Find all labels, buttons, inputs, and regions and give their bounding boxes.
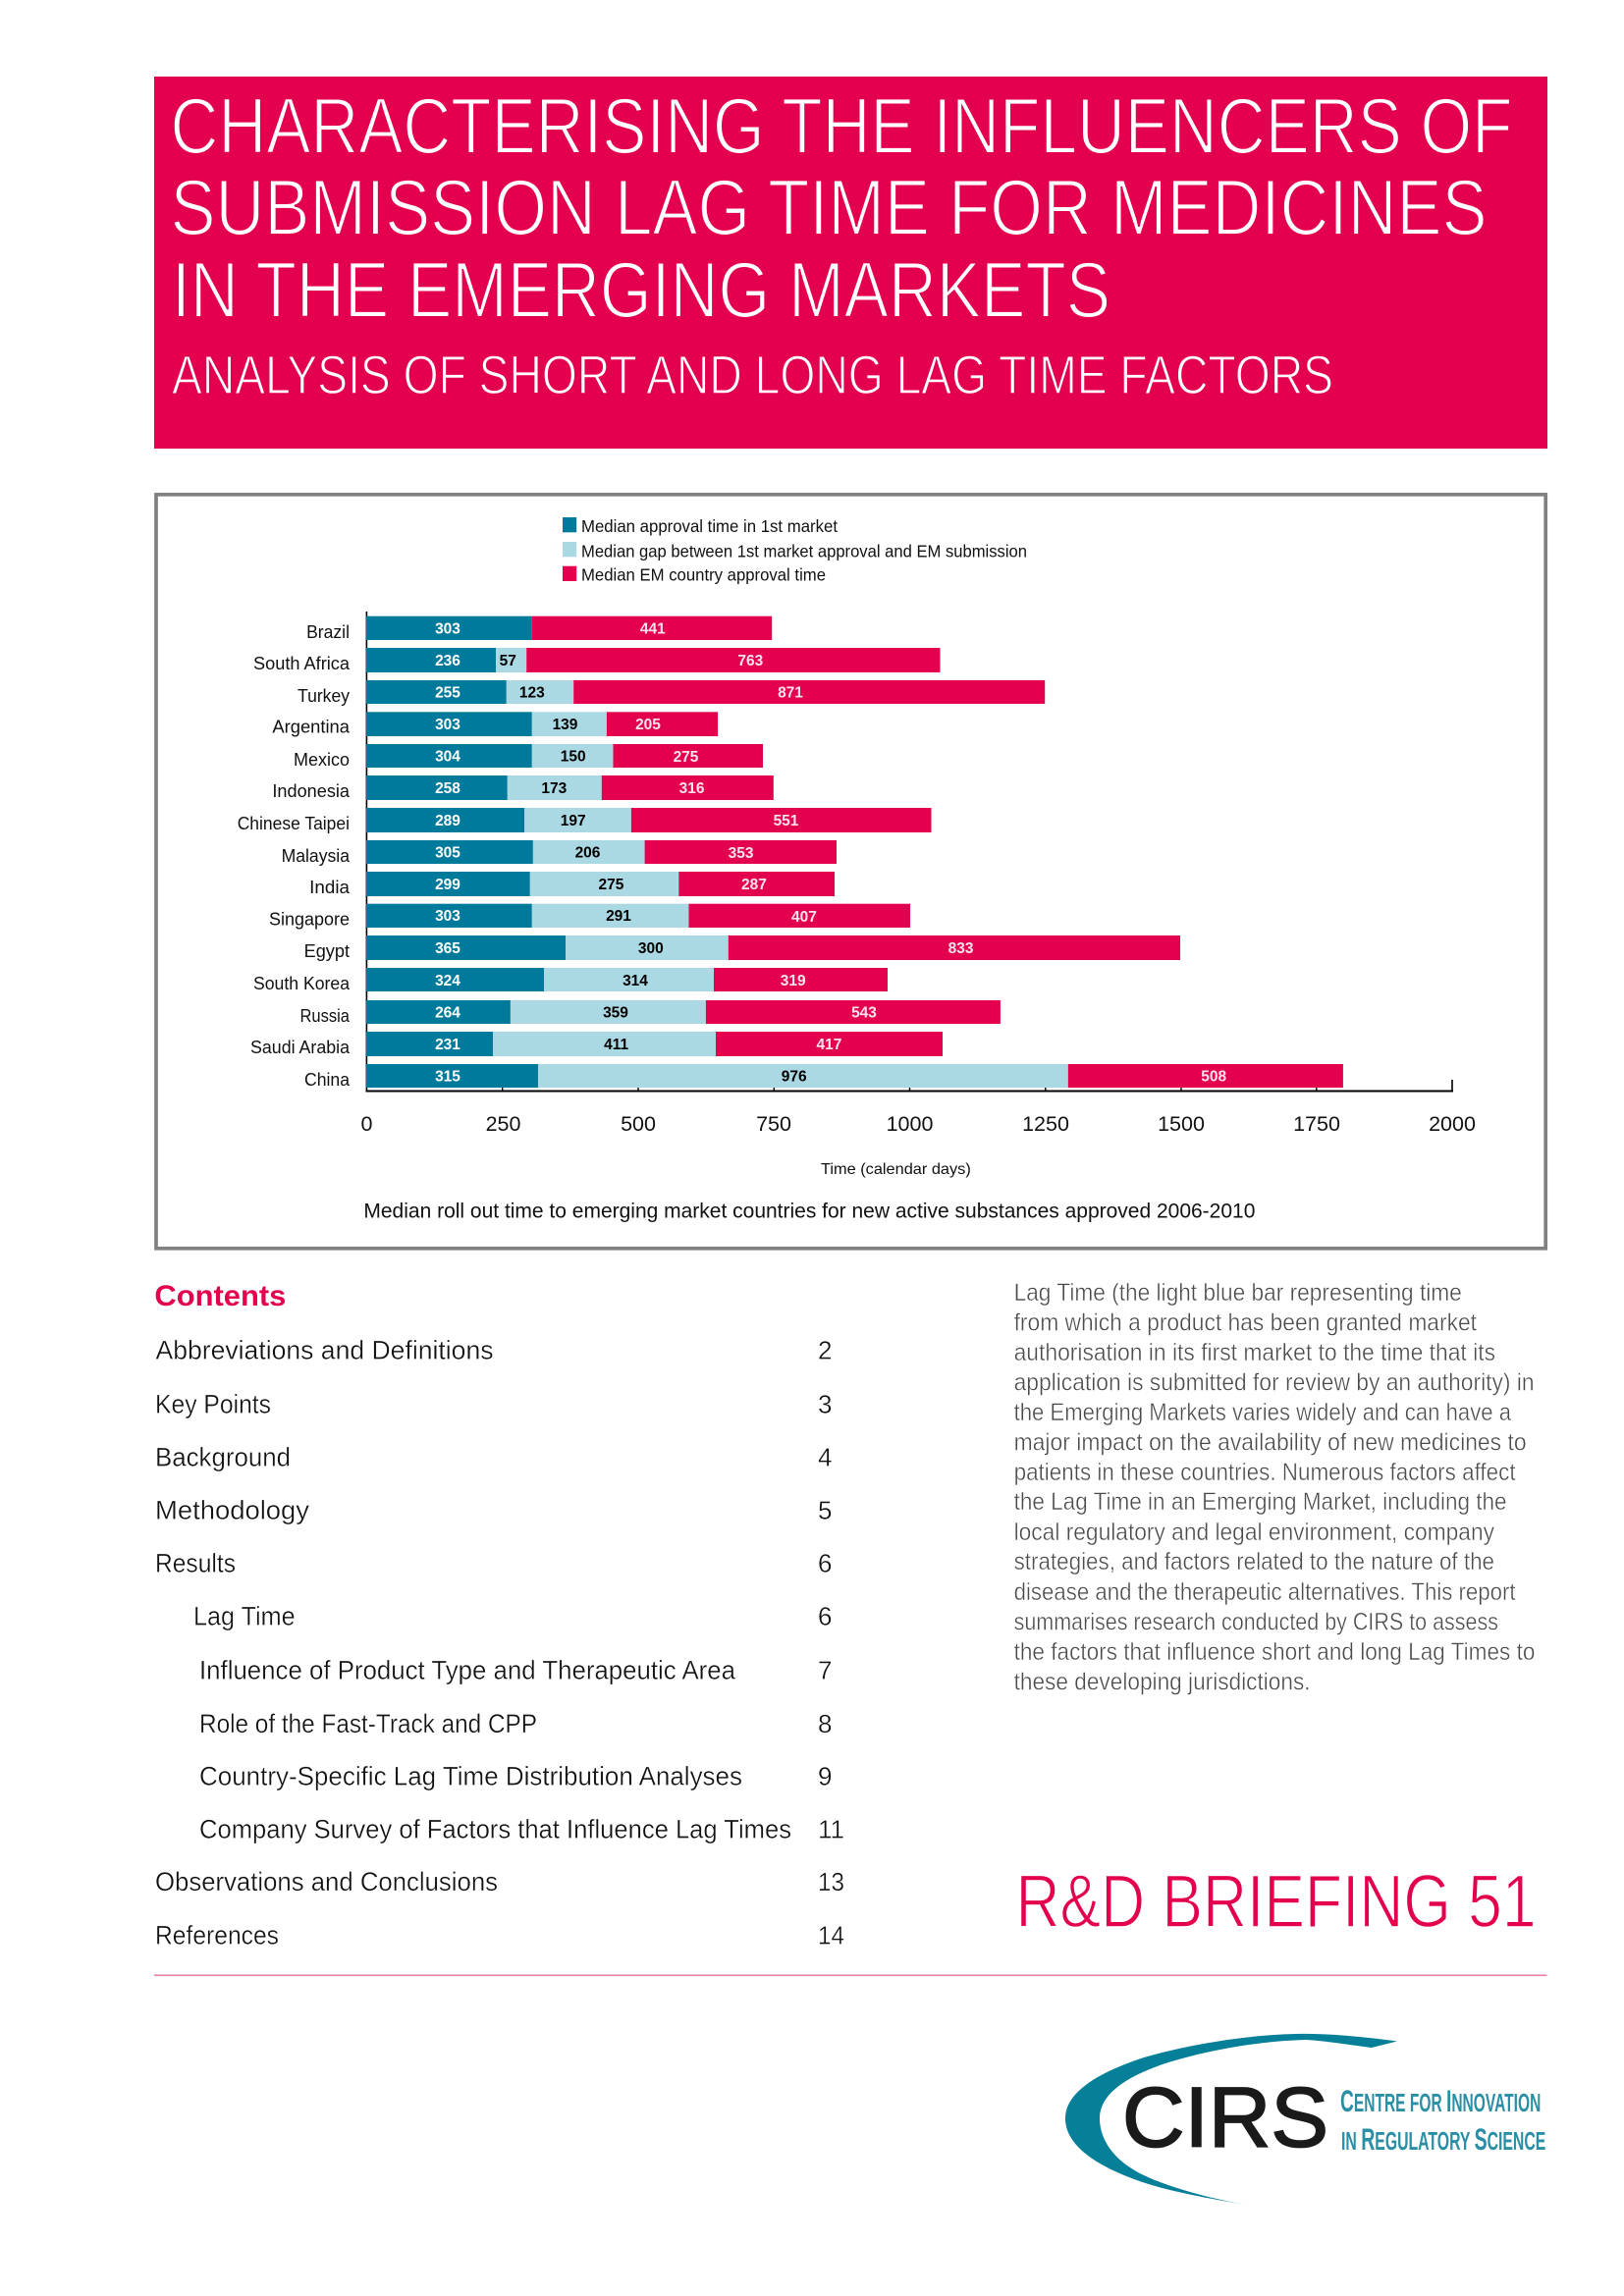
bar: Egypt: 833 bbox=[948, 940, 974, 957]
contents entries: Role of the Fast-Track and CPP bbox=[199, 1709, 537, 1738]
bar: Russia: 359 bbox=[603, 1005, 628, 1021]
bar: Argentina: Argentina bbox=[272, 718, 351, 737]
x axis labels bbox=[361, 1112, 1476, 1136]
bar: South Africa: 236 bbox=[435, 653, 460, 669]
bar: Argentina: 139 bbox=[553, 717, 578, 733]
text block: lag time description: authorisation in its first market to the time that its bbox=[1014, 1339, 1495, 1366]
bar: Saudi Arabia bbox=[250, 1032, 943, 1057]
contents entries: Observations and Conclusions bbox=[155, 1867, 498, 1896]
bar: Singapore: 303 bbox=[435, 908, 460, 925]
contents page numbers: 7 bbox=[818, 1656, 832, 1685]
bar: South Korea: South Korea bbox=[253, 974, 351, 993]
bar: Mexico: 275 bbox=[674, 749, 699, 766]
contents page numbers: 2 bbox=[818, 1336, 832, 1365]
bar: Egypt: 300 bbox=[638, 940, 664, 957]
bar: China: 508 bbox=[1201, 1068, 1227, 1086]
legend bbox=[563, 516, 1027, 585]
heading: IN THE EMERGING MARKETS bbox=[172, 246, 1110, 335]
bar: Brazil: 303 bbox=[435, 620, 460, 638]
text block: lag time description: patients in these countries. Numerous factors affect bbox=[1014, 1459, 1516, 1486]
title banner bbox=[154, 77, 1547, 449]
x axis labels: 500 bbox=[621, 1112, 656, 1136]
bar: Saudi Arabia: 231 bbox=[435, 1037, 460, 1053]
bar: Malaysia bbox=[282, 840, 837, 866]
bar: China: China bbox=[304, 1070, 351, 1090]
contents page numbers: 8 bbox=[818, 1709, 832, 1738]
text block: lag time description bbox=[1014, 1279, 1535, 1696]
icon: swoosh bbox=[1065, 2034, 1397, 2205]
contents entries: Country-Specific Lag Time Distribution Analyses bbox=[199, 1761, 742, 1790]
contents entries: Company Survey of Factors that Influence Lag Times bbox=[199, 1814, 791, 1843]
bar: Argentina: 303 bbox=[435, 717, 460, 733]
x axis labels: 250 bbox=[486, 1112, 520, 1136]
bar: Chinese Taipei: 551 bbox=[774, 813, 799, 829]
x axis labels: 750 bbox=[756, 1112, 791, 1136]
logo organisation name: IN REGULATORY SCIENCE bbox=[1341, 2121, 1545, 2157]
bar: Indonesia: 258 bbox=[435, 780, 460, 797]
bar: Indonesia: 316 bbox=[679, 780, 705, 797]
bar: Malaysia: Malaysia bbox=[282, 846, 351, 866]
contents heading: Contents bbox=[154, 1280, 286, 1312]
bar: Saudi Arabia: Saudi Arabia bbox=[250, 1038, 351, 1057]
contents page numbers: 13 bbox=[818, 1867, 844, 1896]
bar: Russia: Russia bbox=[300, 1006, 351, 1026]
contents entries bbox=[155, 1336, 791, 1950]
bar: Mexico: 150 bbox=[561, 748, 586, 766]
bar: South Africa: 763 bbox=[737, 653, 764, 669]
bar: Indonesia: Indonesia bbox=[272, 781, 351, 801]
bar: Chinese Taipei bbox=[238, 808, 931, 833]
text block: lag time description: the Lag Time in an Emerging Market, including the bbox=[1014, 1488, 1507, 1516]
subheading: ANALYSIS OF SHORT AND LONG LAG TIME FACTORS bbox=[172, 344, 1333, 405]
bar: Egypt: Egypt bbox=[304, 941, 350, 961]
x axis title: Time (calendar days) bbox=[821, 1161, 971, 1178]
bar: Turkey: 871 bbox=[778, 685, 803, 701]
legend: Median approval time in 1st market bbox=[581, 516, 838, 536]
bar: China bbox=[304, 1064, 1343, 1090]
contents entries: Key Points bbox=[155, 1389, 271, 1418]
bar: Chinese Taipei: 197 bbox=[561, 813, 586, 829]
bar: Turkey: 255 bbox=[435, 685, 460, 701]
contents entries: Abbreviations and Definitions bbox=[155, 1336, 493, 1365]
text block: lag time description: major impact on the availability of new medicines to bbox=[1014, 1429, 1527, 1457]
bar: Turkey bbox=[298, 680, 1045, 706]
bar: Russia: 264 bbox=[435, 1005, 460, 1021]
bar: China: 976 bbox=[782, 1068, 807, 1086]
bar: Russia: 543 bbox=[851, 1005, 877, 1021]
bar: India: India bbox=[309, 878, 351, 897]
bar: Indonesia bbox=[272, 775, 774, 801]
bar: Singapore: Singapore bbox=[269, 910, 350, 930]
logo wordmark: CIRS bbox=[1122, 2071, 1328, 2165]
contents entries: Methodology bbox=[155, 1495, 310, 1524]
contents page numbers bbox=[818, 1336, 844, 1950]
text block: lag time description: strategies, and factors related to the nature of the bbox=[1014, 1548, 1494, 1575]
text block: lag time description: these developing jurisdictions. bbox=[1014, 1669, 1311, 1696]
heading bbox=[171, 82, 1512, 335]
bar: Egypt bbox=[304, 935, 1180, 961]
logo: CIRS bbox=[1065, 2034, 1545, 2205]
bar: South Africa: South Africa bbox=[253, 654, 351, 673]
contents entries: References bbox=[155, 1921, 279, 1950]
bar: Saudi Arabia: 417 bbox=[816, 1037, 841, 1053]
contents page numbers: 5 bbox=[818, 1495, 832, 1524]
logo organisation name bbox=[1340, 2083, 1545, 2157]
x axis labels: 1000 bbox=[887, 1112, 933, 1136]
axes bbox=[366, 612, 1453, 1092]
bar: Brazil bbox=[306, 616, 772, 642]
bar: Singapore bbox=[269, 904, 910, 930]
chart caption: Median roll out time to emerging market countries for new active substances approved 2006-2010 bbox=[363, 1201, 1255, 1223]
bar: Singapore: 407 bbox=[791, 909, 817, 926]
bar: South Korea: 324 bbox=[435, 973, 460, 989]
contents entries: Influence of Product Type and Therapeutic Area bbox=[199, 1656, 736, 1685]
bar: Singapore: 291 bbox=[606, 908, 631, 925]
contents entries: Background bbox=[155, 1442, 291, 1471]
bar: Saudi Arabia: 411 bbox=[604, 1037, 628, 1053]
bar: Argentina bbox=[272, 712, 718, 737]
bar: South Africa: 57 bbox=[500, 653, 516, 669]
panel: stacked bar chart bbox=[156, 495, 1545, 1249]
bar: Chinese Taipei: 289 bbox=[435, 813, 460, 829]
x axis labels: 1250 bbox=[1022, 1112, 1069, 1136]
bar: Turkey: Turkey bbox=[298, 686, 350, 706]
bar: India: 299 bbox=[435, 877, 460, 893]
text block: lag time description: Lag Time (the light blue bar representing time bbox=[1014, 1279, 1462, 1307]
bar: Turkey: 123 bbox=[519, 685, 545, 701]
contents page numbers: 6 bbox=[818, 1601, 832, 1630]
bar: South Korea: 314 bbox=[623, 973, 648, 989]
bar: South Korea: 319 bbox=[781, 973, 806, 989]
text block: lag time description: disease and the therapeutic alternatives. This report bbox=[1014, 1578, 1516, 1606]
bar: Egypt: 365 bbox=[435, 940, 460, 957]
bar: South Africa bbox=[253, 648, 941, 673]
bar: Chinese Taipei: Chinese Taipei bbox=[238, 814, 350, 833]
bar: Malaysia: 206 bbox=[575, 844, 601, 862]
bar: Argentina: 205 bbox=[635, 717, 661, 733]
contents entries: Lag Time bbox=[193, 1601, 296, 1630]
bar: Mexico: Mexico bbox=[294, 750, 350, 770]
contents entries: Results bbox=[155, 1549, 236, 1578]
bar: India bbox=[309, 872, 835, 897]
bar: Malaysia: 353 bbox=[729, 845, 754, 862]
contents page numbers: 3 bbox=[818, 1389, 832, 1418]
text block: lag time description: from which a product has been granted market bbox=[1014, 1309, 1477, 1337]
bar: Russia bbox=[300, 1000, 1001, 1026]
bar: Brazil: Brazil bbox=[306, 622, 350, 642]
bar: Indonesia: 173 bbox=[541, 780, 568, 797]
text block: lag time description: the Emerging Markets varies widely and can have a bbox=[1014, 1399, 1511, 1426]
bar: China: 315 bbox=[435, 1068, 460, 1086]
contents page numbers: 9 bbox=[818, 1761, 832, 1790]
x axis labels: 2000 bbox=[1429, 1112, 1476, 1136]
x axis labels: 1750 bbox=[1293, 1112, 1340, 1136]
text block: lag time description: local regulatory and legal environment, company bbox=[1014, 1519, 1494, 1546]
contents page numbers: 11 bbox=[818, 1814, 844, 1843]
bar: Brazil: 441 bbox=[640, 620, 666, 638]
x axis labels: 0 bbox=[361, 1112, 373, 1136]
text block: lag time description: the factors that influence short and long Lag Times to bbox=[1014, 1638, 1535, 1666]
bar: Malaysia: 305 bbox=[435, 844, 460, 862]
logo organisation name: CENTRE FOR INNOVATION bbox=[1340, 2083, 1541, 2118]
bar: South Korea bbox=[253, 968, 888, 993]
legend: Median EM country approval time bbox=[581, 565, 826, 585]
legend: Median gap between 1st market approval and EM submission bbox=[581, 541, 1027, 561]
x axis labels: 1500 bbox=[1158, 1112, 1205, 1136]
contents page numbers: 4 bbox=[818, 1442, 832, 1471]
text block: lag time description: application is submitted for review by an authority) in bbox=[1014, 1369, 1535, 1397]
contents page numbers: 14 bbox=[818, 1921, 844, 1950]
bar: India: 275 bbox=[598, 877, 624, 893]
contents list bbox=[154, 1280, 844, 1950]
bar: Mexico bbox=[294, 744, 763, 770]
text block: lag time description: summarises research conducted by CIRS to assess bbox=[1014, 1609, 1498, 1636]
bar: India: 287 bbox=[741, 877, 767, 893]
bar: Mexico: 304 bbox=[435, 748, 460, 766]
contents page numbers: 6 bbox=[818, 1549, 832, 1578]
